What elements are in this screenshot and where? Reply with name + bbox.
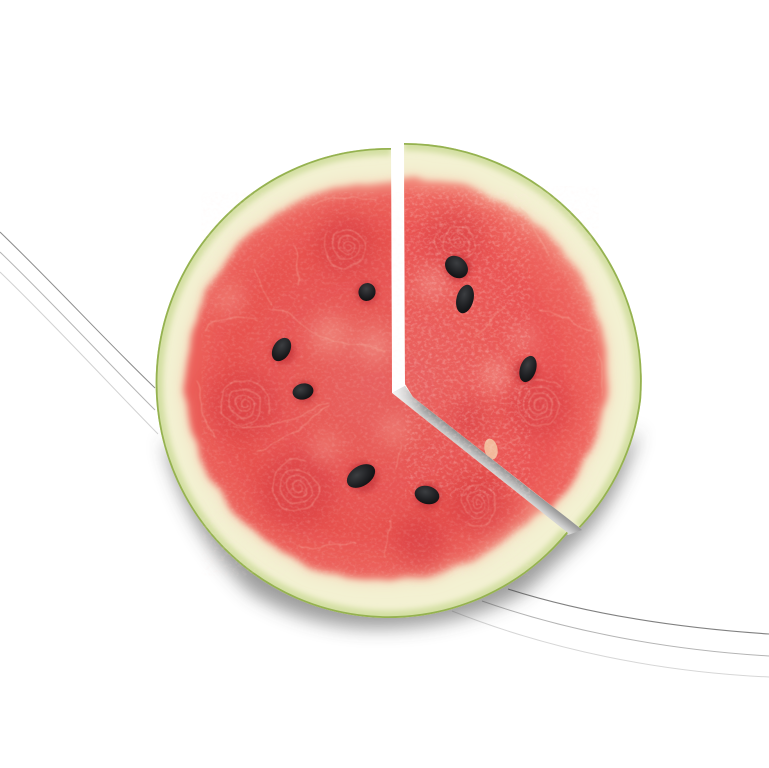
flesh halo: main piece [185,182,560,580]
pale patches: main piece [216,286,409,461]
outer skin line: main piece [156,148,568,618]
pale patches: right piece [418,269,533,389]
seed 5 [268,334,295,365]
flesh halo: right piece [404,172,614,510]
outer skin line: right piece [404,143,642,528]
texture over flesh: main piece [202,192,530,576]
darker swirl patches: main piece [209,215,508,566]
seed 4 [356,281,378,303]
swirl fibres: right piece [429,205,603,448]
green skin edge: right piece [404,143,642,528]
flesh: right piece [404,173,612,509]
gap shadow between slices [392,386,582,535]
seed 7 [343,459,379,493]
seed 2 [453,283,477,315]
large melon piece [156,148,568,618]
green skin edge: main piece [156,148,568,618]
seed 1 [441,251,472,283]
drop shadow under the melon [163,430,640,628]
pale seed [484,438,498,460]
flesh: main piece [185,182,560,580]
seeds [268,251,540,507]
seed 3 [516,354,540,384]
seed 8 [413,483,441,507]
upper-right melon piece [404,143,642,528]
swirl fibres: main piece [196,198,506,556]
seed 6 [291,381,315,402]
infographic: watermelon slice pie chart [0,143,769,678]
texture over flesh: right piece [405,186,599,497]
seed halos [271,255,538,509]
darker swirl patches: right piece [427,210,572,440]
rind: right piece [400,140,650,535]
guide lines: three thin curves behind the melon [0,232,769,677]
rind: main piece [160,150,566,618]
